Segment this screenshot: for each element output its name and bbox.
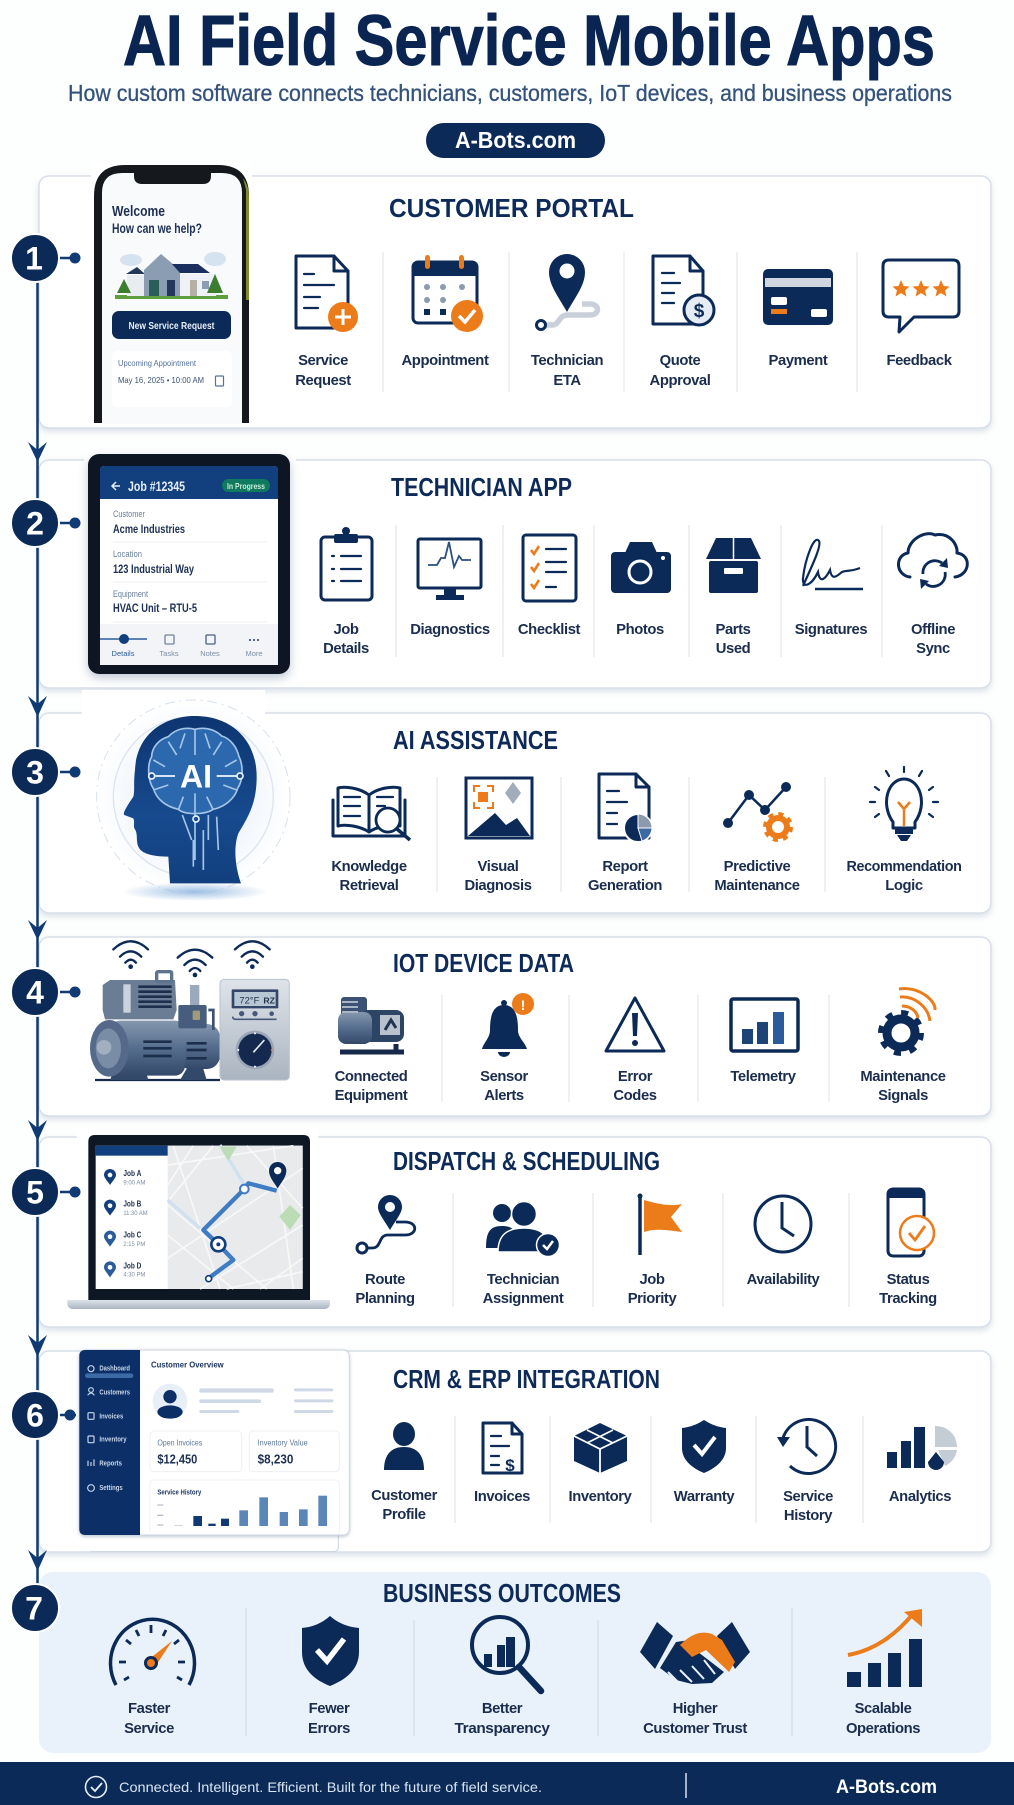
heading: crm and erp integration: CRM & ERP INTEGRATION bbox=[393, 1364, 660, 1394]
item: parts used: Used bbox=[716, 641, 751, 657]
connected equipment illustration bbox=[80, 940, 300, 1097]
item: predictive maintenance bbox=[714, 782, 800, 894]
item: customer profile bbox=[371, 1422, 438, 1523]
tablet mockup: 123 Industrial Way bbox=[113, 564, 194, 576]
card: upcoming appointment: May 16, 2025 • 10:00 AM bbox=[118, 375, 204, 385]
item: service request bbox=[295, 256, 358, 389]
item: warranty bbox=[674, 1420, 735, 1505]
item: inventory bbox=[568, 1423, 633, 1505]
tablet mockup bbox=[84, 450, 296, 682]
item: invoices bbox=[474, 1423, 530, 1505]
footer bar: Connected. Intelligent. Efficient. Built for the future of field service. bbox=[119, 1779, 542, 1795]
item: technician assignment bbox=[483, 1202, 564, 1307]
item: diagnostics bbox=[410, 539, 490, 638]
item: better transparency: Better bbox=[482, 1701, 523, 1717]
item: availability: Availability bbox=[747, 1272, 821, 1288]
panel: crm and erp integration bbox=[39, 1350, 991, 1552]
item: offline sync: Offline bbox=[911, 622, 955, 638]
item: status tracking: Tracking bbox=[879, 1291, 937, 1307]
panel: technician app bbox=[39, 450, 991, 688]
item: customer profile: Profile bbox=[382, 1507, 426, 1523]
phone mockup: Welcome bbox=[112, 203, 165, 220]
item: job priority: Priority bbox=[628, 1291, 677, 1307]
ai head illustration bbox=[82, 690, 290, 903]
item: job details: Details bbox=[323, 641, 369, 657]
item: error codes: Error bbox=[618, 1069, 653, 1085]
item: fewer errors: Fewer bbox=[309, 1701, 350, 1717]
laptop route map: 9:00 AM bbox=[123, 1179, 145, 1186]
item: telemetry: Telemetry bbox=[730, 1069, 797, 1085]
item: availability bbox=[747, 1196, 821, 1288]
panel: customer portal bbox=[39, 163, 991, 428]
tablet mockup: More bbox=[245, 649, 263, 658]
step badges: 1 bbox=[25, 240, 43, 276]
flow connector bbox=[28, 235, 47, 1590]
card: upcoming appointment bbox=[112, 351, 232, 407]
tablet mockup: Details bbox=[112, 649, 135, 658]
item: connected equipment: Equipment bbox=[335, 1088, 408, 1104]
step badges: 5 bbox=[26, 1174, 44, 1210]
item: status tracking: Status bbox=[887, 1272, 930, 1288]
laptop route map: 4:30 PM bbox=[123, 1272, 145, 1279]
footer bar bbox=[0, 1762, 1014, 1805]
card: upcoming appointment: Upcoming Appointment bbox=[118, 358, 197, 368]
phone mockup: How can we help? bbox=[112, 221, 202, 236]
panel: iot device data bbox=[39, 937, 991, 1116]
item: faster service: Service bbox=[124, 1721, 174, 1737]
item: scalable operations bbox=[846, 1609, 922, 1737]
item: analytics: Analytics bbox=[889, 1489, 951, 1505]
item: feedback bbox=[883, 260, 959, 369]
tablet mockup: Tasks bbox=[159, 649, 179, 658]
tablet mockup: HVAC Unit – RTU-5 bbox=[113, 603, 197, 615]
crm dashboard mockup: Customers bbox=[99, 1387, 130, 1396]
connected equipment illustration: RZ bbox=[263, 995, 276, 1005]
panel: ai assistance bbox=[39, 690, 991, 913]
subtitle: How custom software connects technicians, customers, IoT devices, and business operations bbox=[68, 80, 952, 106]
item: customer profile: Customer bbox=[371, 1488, 438, 1504]
item: quote approval: Quote bbox=[660, 353, 701, 369]
item: sensor alerts bbox=[480, 993, 534, 1104]
crm dashboard mockup: $12,450 bbox=[157, 1452, 197, 1466]
item: photos bbox=[611, 542, 671, 638]
heading: technician app: TECHNICIAN APP bbox=[391, 472, 572, 502]
item: connected equipment: Connected bbox=[335, 1069, 408, 1085]
item: error codes: Codes bbox=[613, 1088, 657, 1104]
tablet mockup: Acme Industries bbox=[113, 524, 185, 536]
tablet mockup: Notes bbox=[200, 649, 220, 658]
item: appointment bbox=[402, 255, 489, 369]
item: route planning: Route bbox=[365, 1272, 405, 1288]
item: route planning bbox=[355, 1195, 415, 1307]
house illustration bbox=[115, 252, 228, 297]
item: route planning: Planning bbox=[355, 1291, 415, 1307]
item: technician eta bbox=[531, 254, 603, 389]
item: job priority bbox=[628, 1194, 682, 1307]
crm dashboard mockup bbox=[79, 1350, 349, 1552]
crm dashboard mockup: Dashboard bbox=[99, 1364, 130, 1373]
item: scalable operations: Scalable bbox=[855, 1701, 912, 1717]
item: visual diagnosis: Diagnosis bbox=[464, 878, 532, 894]
tablet mockup: Customer bbox=[113, 509, 145, 519]
item: recommendation logic bbox=[846, 767, 962, 894]
item: payment bbox=[763, 269, 833, 369]
item: service history: History bbox=[784, 1508, 833, 1524]
item: parts used: Parts bbox=[715, 622, 751, 638]
item: status tracking bbox=[879, 1189, 937, 1307]
heading: iot device data: IOT DEVICE DATA bbox=[393, 948, 574, 978]
item: sensor alerts: Alerts bbox=[484, 1088, 524, 1104]
item: quote approval bbox=[650, 256, 714, 389]
item: visual diagnosis bbox=[464, 778, 532, 894]
item: technician assignment: Assignment bbox=[483, 1291, 564, 1307]
item: connected equipment bbox=[335, 997, 408, 1104]
item: higher customer trust bbox=[640, 1622, 750, 1737]
item: maintenance signals bbox=[860, 989, 946, 1104]
item: parts used bbox=[706, 538, 761, 657]
crm dashboard mockup: Invoices bbox=[99, 1411, 123, 1420]
item: service request: Service bbox=[298, 353, 348, 369]
crm dashboard mockup: Reports bbox=[99, 1459, 122, 1468]
laptop route map bbox=[67, 1128, 330, 1315]
status pill bbox=[222, 479, 270, 492]
panel: business outcomes bbox=[39, 1572, 991, 1753]
connected equipment illustration: 72°F bbox=[239, 995, 260, 1005]
item: knowledge retrieval bbox=[331, 787, 410, 894]
item: maintenance signals: Signals bbox=[878, 1088, 928, 1104]
item: telemetry bbox=[730, 999, 798, 1085]
wifi signals bbox=[113, 941, 270, 971]
item: predictive maintenance: Predictive bbox=[724, 859, 791, 875]
crm dashboard mockup: Inventory Value bbox=[258, 1438, 308, 1447]
heading: business outcomes: BUSINESS OUTCOMES bbox=[383, 1578, 621, 1608]
item: service history bbox=[777, 1419, 836, 1524]
step badges: 7 bbox=[25, 1590, 43, 1626]
item: faster service: Faster bbox=[128, 1701, 171, 1717]
item: better transparency bbox=[454, 1617, 551, 1737]
item: signatures bbox=[795, 540, 867, 638]
crm dashboard mockup: Settings bbox=[99, 1483, 123, 1492]
item: inventory: Inventory bbox=[568, 1489, 633, 1505]
item: better transparency: Transparency bbox=[454, 1721, 551, 1737]
item: job details: Job bbox=[333, 622, 359, 638]
tablet mockup: Location bbox=[113, 549, 142, 559]
item: report generation: Report bbox=[602, 859, 648, 875]
item: technician eta: Technician bbox=[531, 353, 603, 369]
item: quote approval: $ bbox=[694, 301, 705, 322]
step badges: 2 bbox=[26, 506, 44, 542]
step badges: 6 bbox=[26, 1398, 44, 1434]
item: maintenance signals: Maintenance bbox=[860, 1069, 946, 1085]
brand pill bbox=[426, 123, 605, 158]
item: faster service bbox=[110, 1619, 194, 1737]
item: photos: Photos bbox=[616, 622, 664, 638]
ai head illustration: AI bbox=[180, 759, 212, 795]
crm dashboard mockup: Inventory bbox=[99, 1435, 127, 1444]
item: fewer errors bbox=[302, 1616, 359, 1737]
item: sensor alerts: ! bbox=[521, 997, 525, 1013]
item: signatures: Signatures bbox=[795, 622, 867, 638]
footer bar: A-Bots.com bbox=[836, 1777, 937, 1798]
item: sensor alerts: Sensor bbox=[480, 1069, 529, 1085]
item: report generation bbox=[588, 774, 662, 894]
item: quote approval: Approval bbox=[650, 373, 711, 389]
button: new service request bbox=[112, 311, 231, 339]
crm dashboard mockup: Customer Overview bbox=[151, 1360, 224, 1370]
item: higher customer trust: Customer Trust bbox=[643, 1721, 747, 1737]
item: higher customer trust: Higher bbox=[673, 1701, 718, 1717]
button: new service request: New Service Request bbox=[128, 320, 215, 332]
brand pill: A-Bots.com bbox=[455, 127, 576, 153]
item: service history: Service bbox=[783, 1489, 833, 1505]
heading: ai assistance: AI ASSISTANCE bbox=[393, 725, 558, 755]
item: error codes bbox=[606, 998, 664, 1104]
item: scalable operations: Operations bbox=[846, 1721, 920, 1737]
item: visual diagnosis: Visual bbox=[478, 859, 519, 875]
crm dashboard mockup: Service History bbox=[157, 1487, 202, 1496]
laptop route map: 2:15 PM bbox=[123, 1241, 145, 1248]
item: warranty: Warranty bbox=[674, 1489, 735, 1505]
laptop route map: Job C bbox=[123, 1231, 142, 1240]
item: checklist bbox=[518, 535, 581, 638]
item: diagnostics: Diagnostics bbox=[410, 622, 490, 638]
item: feedback: Feedback bbox=[886, 353, 953, 369]
item: offline sync bbox=[898, 534, 967, 657]
laptop route map: 11:30 AM bbox=[123, 1210, 148, 1217]
laptop route map: Job A bbox=[123, 1169, 142, 1178]
item: appointment: Appointment bbox=[402, 353, 489, 369]
item: knowledge retrieval: Retrieval bbox=[340, 878, 399, 894]
step badges: 4 bbox=[26, 974, 44, 1010]
item: analytics bbox=[887, 1426, 957, 1505]
phone mockup bbox=[91, 163, 252, 424]
tablet mockup: Equipment bbox=[113, 589, 148, 599]
step badges: 3 bbox=[26, 754, 44, 790]
crm dashboard mockup: $8,230 bbox=[258, 1452, 293, 1466]
item: knowledge retrieval: Knowledge bbox=[331, 859, 407, 875]
item: technician assignment: Technician bbox=[487, 1272, 559, 1288]
item: job details bbox=[321, 527, 372, 657]
item: payment: Payment bbox=[769, 353, 828, 369]
heading: customer portal: CUSTOMER PORTAL bbox=[389, 193, 634, 223]
item: job priority: Job bbox=[639, 1272, 665, 1288]
item: technician eta: ETA bbox=[553, 373, 581, 389]
tablet mockup: Job #12345 bbox=[128, 478, 185, 494]
heading: dispatch and scheduling: DISPATCH & SCHEDULING bbox=[393, 1146, 660, 1176]
item: checklist: Checklist bbox=[518, 622, 581, 638]
item: invoices: Invoices bbox=[474, 1489, 530, 1505]
arrow heads bbox=[28, 442, 47, 1571]
laptop route map: Job D bbox=[123, 1261, 142, 1270]
status pill: In Progress bbox=[227, 481, 265, 491]
crm dashboard mockup: Open Invoices bbox=[157, 1438, 202, 1447]
item: offline sync: Sync bbox=[916, 641, 950, 657]
item: report generation: Generation bbox=[588, 878, 662, 894]
item: recommendation logic: Recommendation bbox=[846, 859, 962, 875]
panel: dispatch and scheduling bbox=[39, 1128, 991, 1327]
step badges bbox=[11, 234, 80, 1632]
laptop route map: Job B bbox=[123, 1200, 142, 1209]
item: fewer errors: Errors bbox=[308, 1721, 350, 1737]
item: service request: Request bbox=[295, 373, 351, 389]
item: invoices: $ bbox=[505, 1456, 515, 1475]
item: predictive maintenance: Maintenance bbox=[714, 878, 800, 894]
item: recommendation logic: Logic bbox=[885, 878, 923, 894]
